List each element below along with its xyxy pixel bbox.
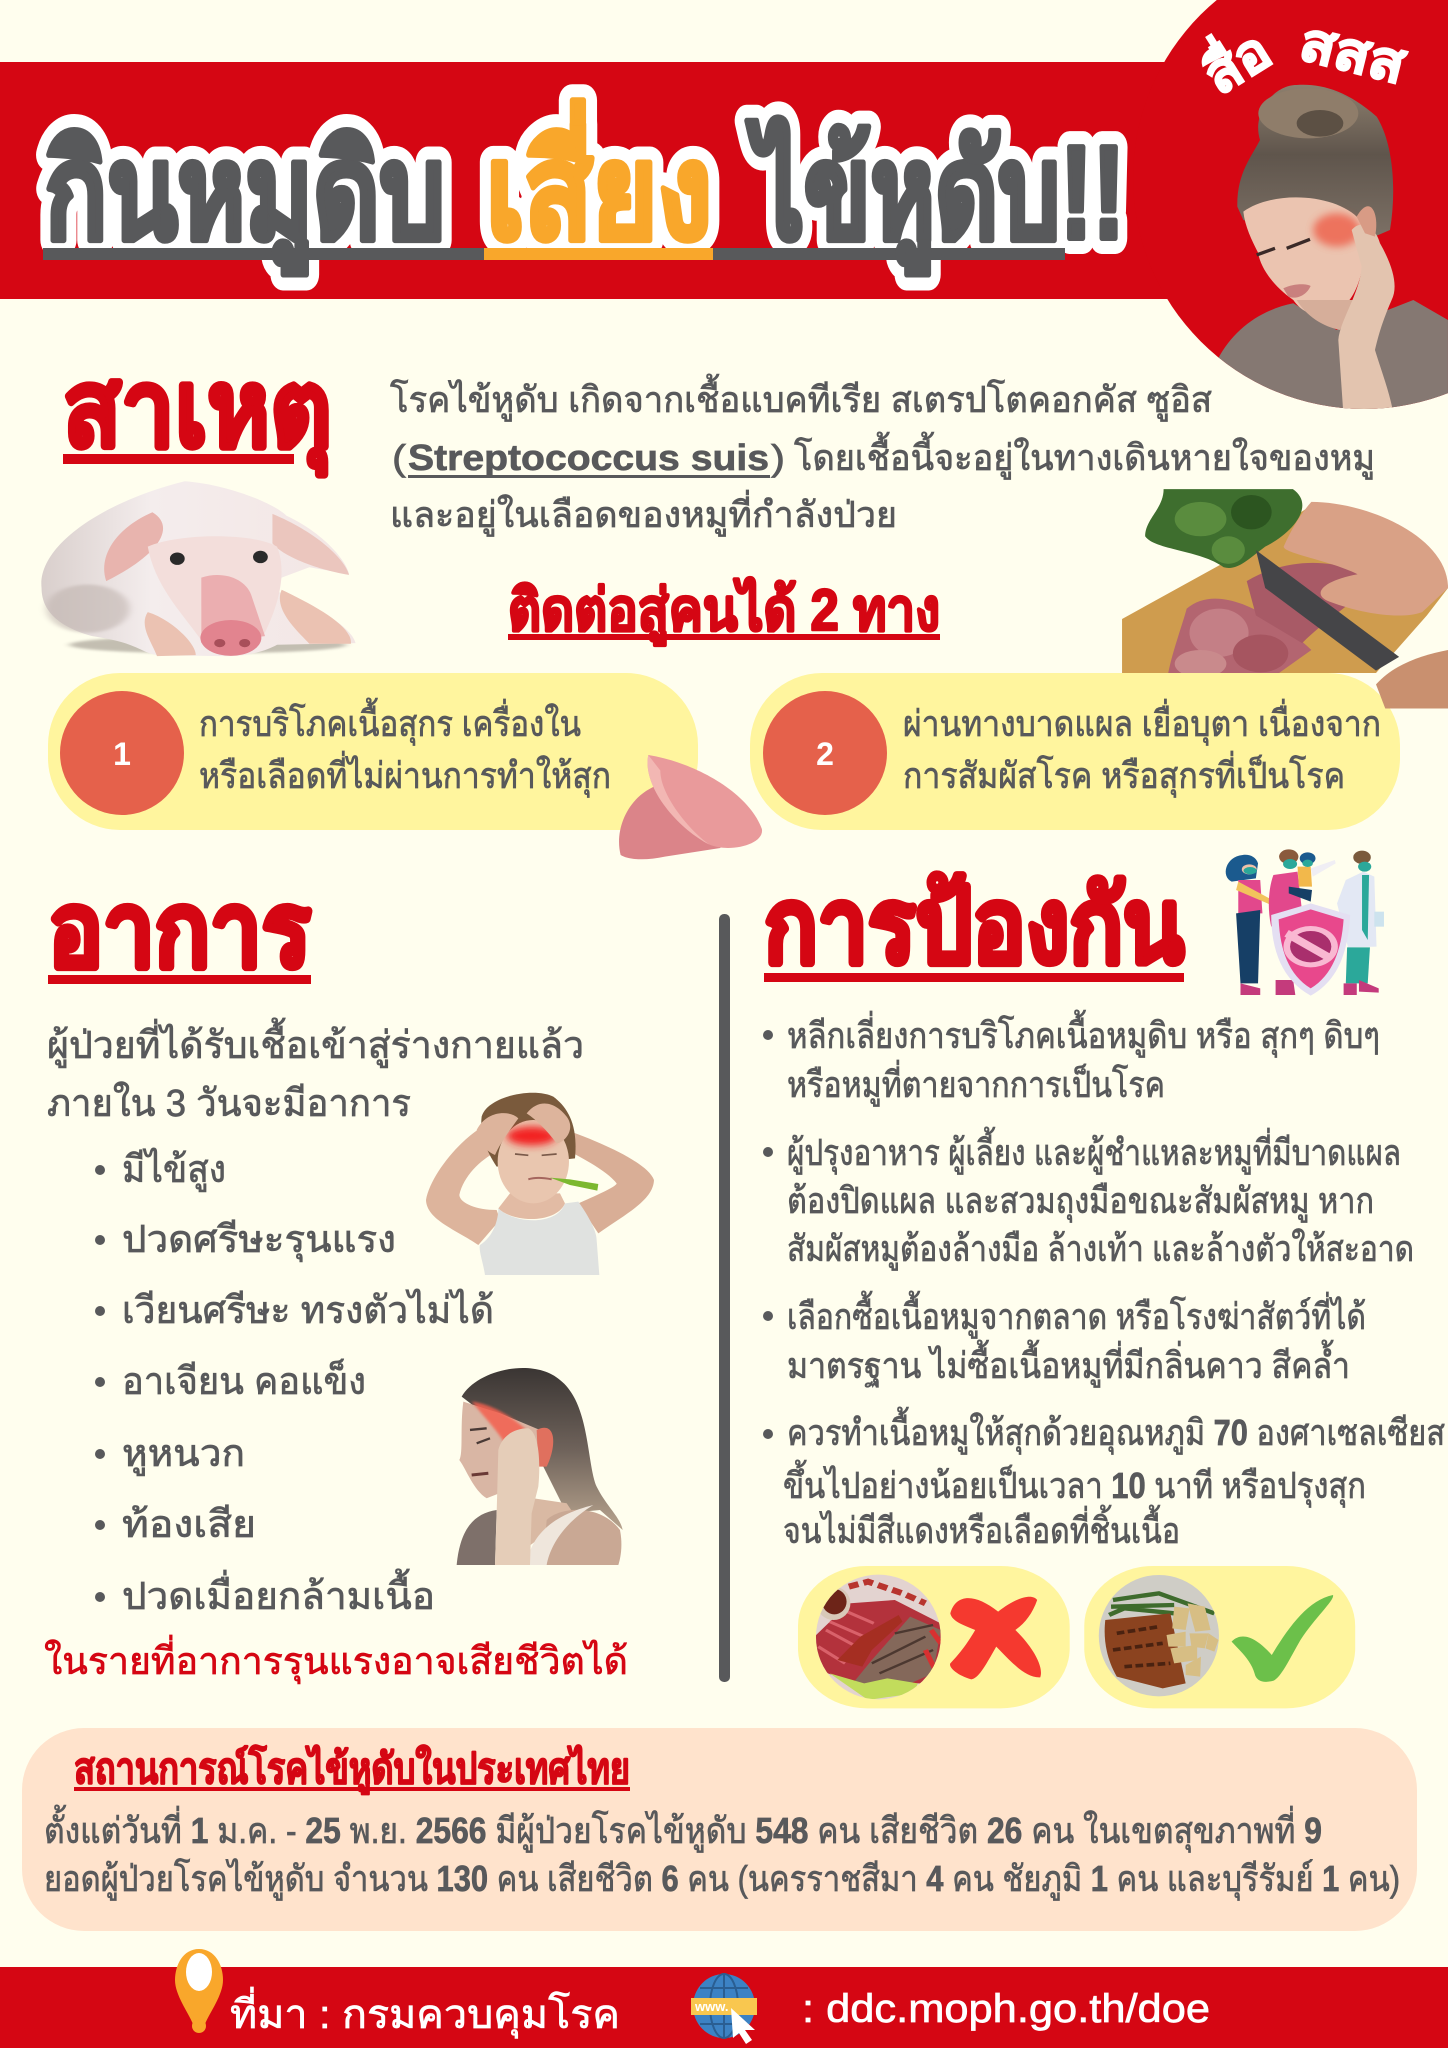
panel: cooked food allowed	[1084, 1566, 1355, 1708]
photo: woman holding her ear	[1218, 85, 1448, 413]
panel: raw food not allowed	[798, 1566, 1070, 1708]
title: เสี่ยง	[486, 99, 712, 266]
text block: cause description: โรคไข้หูดับ เกิดจากเชื้อแบคทีเรีย สเตรปโตคอกคัส ซูอิส	[390, 373, 1212, 422]
situation text	[44, 1804, 1400, 1901]
icon: green check	[1232, 1595, 1333, 1682]
photo: cutting board with raw pork	[1122, 489, 1448, 678]
prevention item 4	[763, 1406, 1445, 1551]
list: symptoms: อาเจียน คอแข็ง	[122, 1358, 366, 1403]
website text: : ddc.moph.go.th/doe	[802, 1987, 1210, 2031]
number badge 2: 2	[816, 736, 834, 772]
text block: symptoms intro	[47, 1017, 584, 1125]
list: symptoms	[95, 1148, 494, 1618]
list: prevention	[763, 1009, 1445, 1551]
icon: red cross	[950, 1597, 1041, 1679]
list: symptoms: ท้องเสีย	[122, 1504, 256, 1546]
icon: family and doctor with shield	[1226, 849, 1384, 996]
route 2 text: ผ่านทางบาดแผล เยื่อบุตา เนื่องจาก	[903, 699, 1381, 746]
prevention item 1: หรือหมูที่ตายจากการเป็นโรค	[787, 1060, 1165, 1107]
photo: lower hand over panel	[1376, 650, 1448, 709]
vertical divider	[719, 914, 730, 1682]
situation heading: สถานการณ์โรคไข้หูดับในประเทศไทย	[74, 1744, 630, 1795]
prevention item 1	[763, 1009, 1380, 1107]
route 2 text	[903, 699, 1381, 798]
route 1 text: หรือเลือดที่ไม่ผ่านการทำให้สุก	[199, 751, 611, 798]
list: symptoms: หูหนวก	[122, 1433, 245, 1476]
title: ไข้หูดับ!!	[746, 117, 1125, 275]
title: กินหมูดิบ	[45, 119, 445, 275]
text block: cause description: Streptococcus suis	[408, 437, 769, 478]
photo: raw pork slices	[619, 755, 762, 859]
list: symptoms: เวียนศรีษะ ทรงตัวไม่ได้	[122, 1289, 494, 1332]
icon: globe with cursor	[691, 1974, 757, 2044]
title: เสี่ยง	[486, 99, 712, 266]
situation text: ยอดผู้ป่วยโรคไข้หูดับ จำนวน 130 คน เสียชีวิต 6 คน (นครราชสีมา 4 คน ชัยภูมิ 1 คน และบุรีรัมย์ 1 คน)	[44, 1858, 1400, 1901]
heading: ติดต่อสู่คนได้ 2 ทาง: ติดต่อสู่คนได้ 2 ทาง	[508, 577, 940, 646]
text block: cause description	[390, 373, 1375, 537]
photo: boy with fever	[426, 1093, 654, 1275]
photo: woman with ear pain	[457, 1368, 623, 1565]
list: symptoms: มีไข้สูง	[122, 1148, 226, 1192]
title	[43, 99, 1125, 275]
route 1 text: การบริโภคเนื้อสุกร เครื่องใน	[199, 697, 581, 746]
photo: pig	[41, 481, 356, 656]
number badge 1	[60, 691, 184, 815]
text block: cause description: )	[771, 437, 785, 478]
prevention item 4: จนไม่มีสีแดงหรือเลือดที่ชิ้นเนื้อ	[783, 1504, 1180, 1551]
herbs	[1145, 489, 1302, 568]
footer band	[0, 1967, 1448, 2048]
heading: การป้องกัน: การป้องกัน	[764, 869, 1184, 985]
photo: cooked pork plate	[1096, 1573, 1222, 1698]
title: ไข้หูดับ!!	[746, 117, 1125, 275]
number badge 2	[763, 691, 887, 815]
warning text: ในรายที่อาการรุนแรงอาจเสียชีวิตได้	[44, 1635, 628, 1684]
icon: location pin	[175, 1949, 223, 2033]
prevention item 3: มาตรฐาน ไม่ซื้อเนื้อหมูที่มีกลิ่นคาว สีคล้ำ	[787, 1339, 1350, 1388]
heading: อาการ: อาการ	[48, 873, 311, 989]
text block: symptoms intro: ภายใน 3 วันจะมีอาการ	[47, 1082, 411, 1125]
prevention item 2	[763, 1126, 1414, 1271]
label: สื่อ สสส	[1189, 11, 1411, 106]
prevention item 4: ขึ้นไปอย่างน้อยเป็นเวลา 10 นาที หรือปรุงสุก	[783, 1459, 1366, 1508]
source text: ที่มา : กรมควบคุมโรค	[230, 1987, 620, 2039]
panel: route 1	[48, 673, 698, 830]
list: symptoms: ปวดศรีษะรุนแรง	[122, 1219, 396, 1262]
panel: route 2	[750, 673, 1400, 830]
text block: cause description: (	[392, 437, 406, 478]
route 1 text	[199, 697, 611, 798]
label: สื่อ สสส: สื่อ	[1189, 13, 1281, 106]
heading: สาเหตุ: สาเหตุ	[63, 348, 332, 477]
route 2 text: การสัมผัสโรค หรือสุกรที่เป็นโรค	[903, 751, 1345, 798]
situation text: ตั้งแต่วันที่ 1 ม.ค. - 25 พ.ย. 2566 มีผู้ป่วยโรคไข้หูดับ 548 คน เสียชีวิต 26 คน ในเขตสุขภาพที่ 9	[44, 1804, 1322, 1853]
title: กินหมูดิบ	[45, 119, 445, 275]
list: symptoms: ปวดเมื่อยกล้ามเนื้อ	[122, 1568, 435, 1618]
header banner	[0, 0, 1448, 409]
prevention item 3	[763, 1290, 1366, 1388]
text block: symptoms intro: ผู้ป่วยที่ได้รับเชื้อเข้าสู่ร่างกายแล้ว	[47, 1017, 584, 1068]
panel: situation in Thailand	[22, 1728, 1417, 1931]
icon: globe with cursor: www.	[694, 1999, 728, 2014]
label: สื่อ สสส: สสส	[1294, 11, 1411, 95]
shield	[1271, 903, 1350, 996]
photo: raw meat plate	[814, 1573, 945, 1700]
text block: cause description: โดยเชื้อนี้จะอยู่ในทางเดินหายใจของหมู	[794, 431, 1375, 480]
text block: cause description: และอยู่ในเลือดของหมูที่กำลังป่วย	[390, 490, 897, 537]
number badge 1: 1	[113, 736, 131, 772]
